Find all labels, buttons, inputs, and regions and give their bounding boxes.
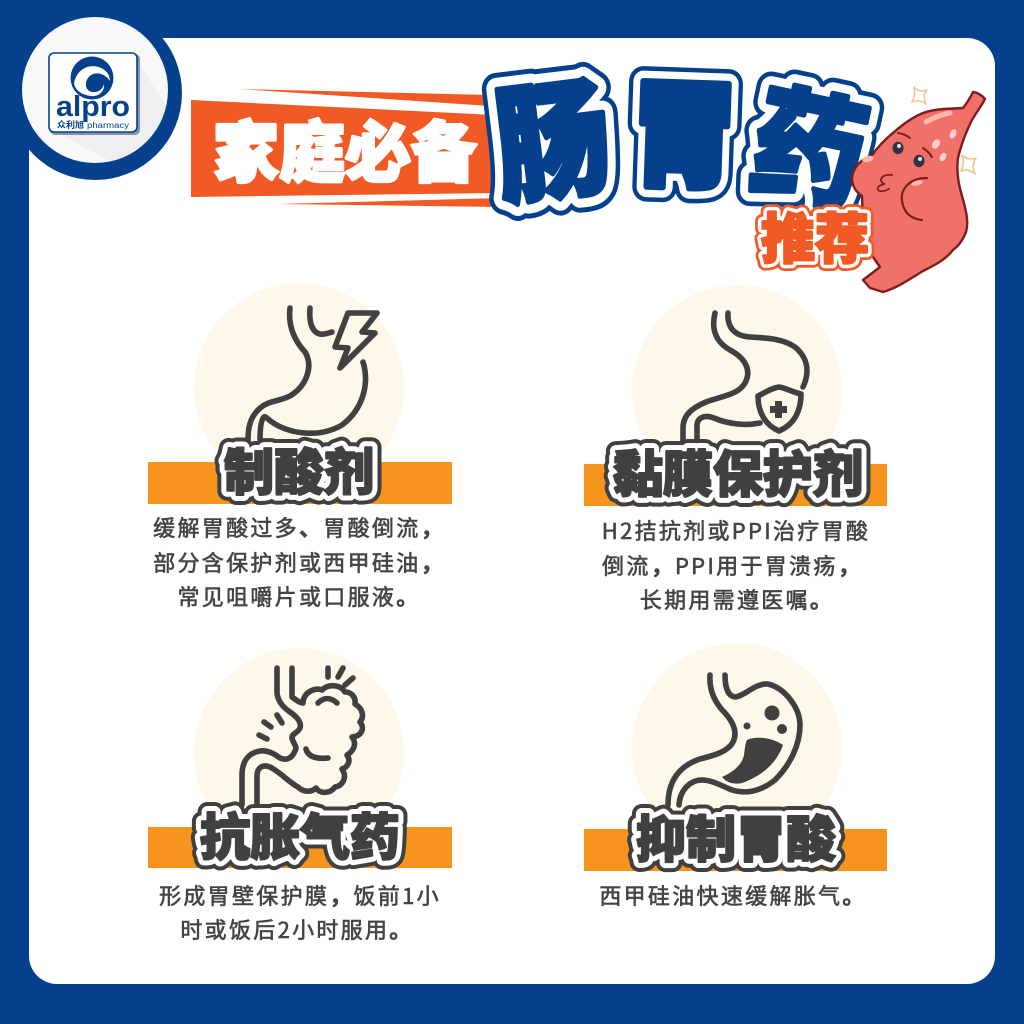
- title: 推荐: 推荐: [761, 195, 869, 274]
- heading: 抑制胃酸: 抑制胃酸: [636, 800, 836, 872]
- title: 肠胃药: [483, 35, 884, 237]
- heading: 抑制胃酸: 抑制胃酸: [636, 800, 836, 872]
- title: 推荐: 推荐: [761, 195, 869, 274]
- title: 肠胃药: 胃: [626, 40, 742, 213]
- title banner: 家庭必备: 家庭必备: [213, 100, 477, 196]
- heading: 抗胀气药: 抗胀气药: [200, 798, 400, 870]
- icon: stomach with lightning bolt: [194, 283, 404, 493]
- icon: stomach with acid bubbles: [632, 643, 842, 853]
- text block: 长期用需遵医嘱。: [640, 583, 834, 615]
- heading: 制酸剂: 制酸剂: [224, 433, 374, 505]
- title: 肠胃药: 胃: [626, 40, 742, 213]
- text block: 常见咀嚼片或口服液。: [177, 580, 421, 612]
- orange bar: [584, 464, 887, 506]
- text block: 时或饭后2小时服用。: [180, 913, 414, 945]
- heading: 黏膜保护剂: 黏膜保护剂: [613, 435, 863, 507]
- text block: 形成胃壁保护膜，饭前1小: [159, 879, 441, 911]
- title: 肠胃药: 药: [738, 43, 884, 237]
- text block: 西甲硅油快速缓解胀气。: [599, 879, 867, 911]
- text block: 缓解胃酸过多、胃酸倒流，: [153, 511, 445, 543]
- orange bar: [148, 462, 452, 504]
- title: 肠胃药: 肠: [483, 35, 620, 232]
- title: 肠胃药: 药: [738, 43, 884, 237]
- icon: bloated stomach: [194, 648, 404, 858]
- heading: 黏膜保护剂: 黏膜保护剂: [613, 435, 863, 507]
- title: 肠胃药: 药: [738, 43, 884, 237]
- heading: 黏膜保护剂: 黏膜保护剂: [613, 435, 863, 507]
- panel: 抗胀气药: [148, 648, 452, 945]
- text block: [153, 511, 445, 612]
- text block: 倒流，PPI用于胃溃疡，: [602, 549, 862, 581]
- title: 推荐: 推荐: [761, 195, 869, 274]
- heading: 抑制胃酸: 抑制胃酸: [636, 800, 836, 872]
- heading: 抗胀气药: 抗胀气药: [200, 798, 400, 870]
- heading: 制酸剂: 制酸剂: [224, 433, 374, 505]
- logo badge: [8, 6, 182, 180]
- orange bar: [584, 829, 887, 871]
- title: 肠胃药: 胃: [626, 40, 742, 213]
- text block: 部分含保护剂或西甲硅油，: [153, 546, 445, 578]
- icon: stomach with shield: [632, 285, 842, 495]
- panel: 黏膜保护剂: [584, 285, 887, 615]
- heading: 抗胀气药: 抗胀气药: [200, 798, 400, 870]
- stomach mascot: [852, 87, 985, 292]
- title: 肠胃药: 肠: [483, 35, 620, 232]
- title: 肠胃药: 肠: [483, 35, 620, 232]
- panel: 抑制胃酸: [584, 643, 887, 911]
- logo badge: 众利旭: [57, 119, 84, 130]
- text block: [159, 879, 441, 945]
- text block: [602, 514, 870, 615]
- logo badge: pharmacy: [87, 121, 129, 130]
- logo badge: alpro: [56, 91, 130, 123]
- heading: 制酸剂: 制酸剂: [224, 433, 374, 505]
- panel: 制酸剂: [148, 283, 452, 612]
- title banner: 家庭必备: [191, 89, 500, 207]
- orange bar: [148, 827, 452, 868]
- text block: H2拮抗剂或PPI治疗胃酸: [602, 514, 870, 546]
